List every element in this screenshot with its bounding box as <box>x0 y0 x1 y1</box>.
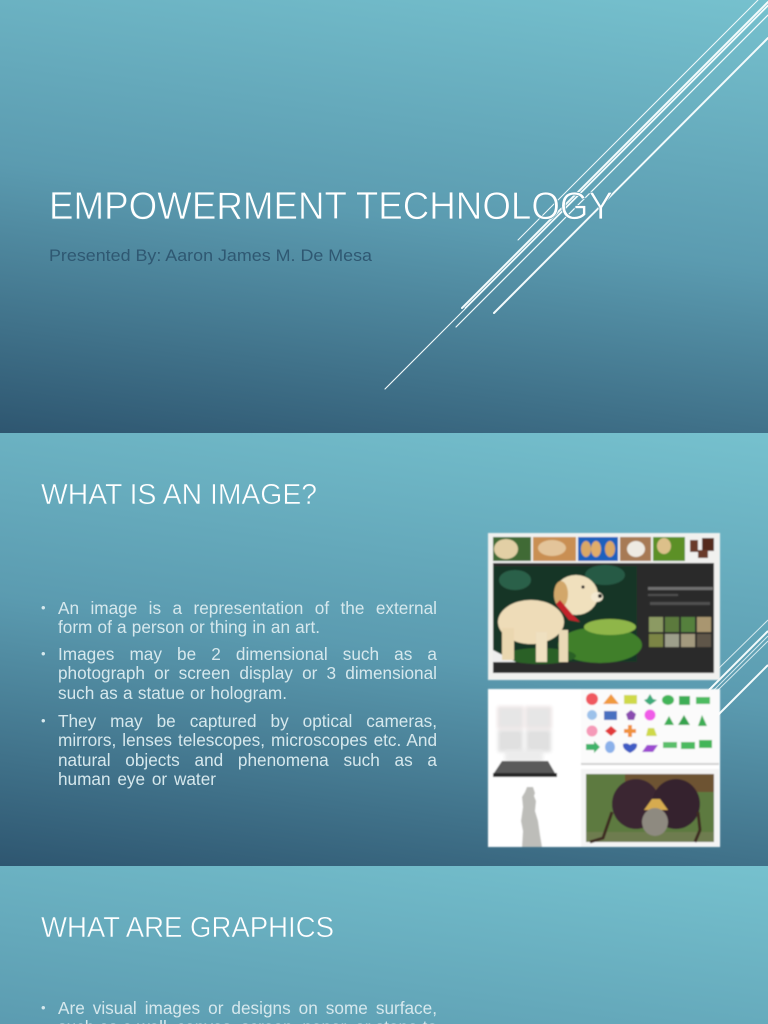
heading: what are graphics: WHAT ARE GRAPHICS <box>41 912 334 944</box>
text block: image bullets <box>41 598 437 789</box>
heading: what is an image: WHAT IS AN IMAGE? <box>41 479 317 511</box>
text block: image bullets: human eye or water <box>58 769 216 789</box>
fly photo <box>581 769 719 847</box>
text block: image bullets: An image is a representation of the external <box>58 598 437 618</box>
slide 3 background <box>0 866 768 1024</box>
title: Empowerment Technology: EMPOWERMENT TECHNOLOGY <box>49 185 613 228</box>
text block: image bullets: • <box>41 600 46 615</box>
text block: graphics bullets: Are visual images or designs on some surface, <box>58 998 437 1018</box>
text block: image bullets: natural objects and phenomena such as a <box>58 750 437 770</box>
slide 1 background <box>0 0 768 433</box>
text block: image bullets: mirrors, lenses telescopes, microscopes etc. And <box>58 730 437 750</box>
shapes panel <box>581 689 719 763</box>
text block: image bullets: Images may be 2 dimensional such as a <box>58 644 437 664</box>
text block: image bullets: such as a statue or hologram. <box>58 683 287 703</box>
statue <box>521 787 542 847</box>
thumbnails <box>493 537 714 561</box>
slide 2 diagonal lines <box>709 620 768 718</box>
text block: image bullets: They may be captured by optical cameras, <box>58 711 437 731</box>
text block: image bullets: photograph or screen display or 3 dimensional <box>58 663 437 683</box>
text block: image bullets: form of a person or thing in an art. <box>58 617 320 637</box>
subtitle: presenter: Presented By: Aaron James M. De Mesa <box>49 246 373 265</box>
image: collage of calculator, shapes, statue and fly <box>488 689 720 847</box>
slide 2 background <box>0 433 768 866</box>
viewer text and tiles <box>648 587 713 647</box>
text block: image bullets: • <box>41 646 46 661</box>
puppy photo <box>493 565 642 664</box>
image: puppy screenshot <box>488 533 720 680</box>
text block: graphics bullets: • <box>41 1000 46 1015</box>
calculator icon <box>498 707 551 762</box>
dark viewer panel <box>493 563 714 673</box>
title slide diagonal lines <box>385 0 768 389</box>
text block: image bullets: • <box>41 713 46 728</box>
